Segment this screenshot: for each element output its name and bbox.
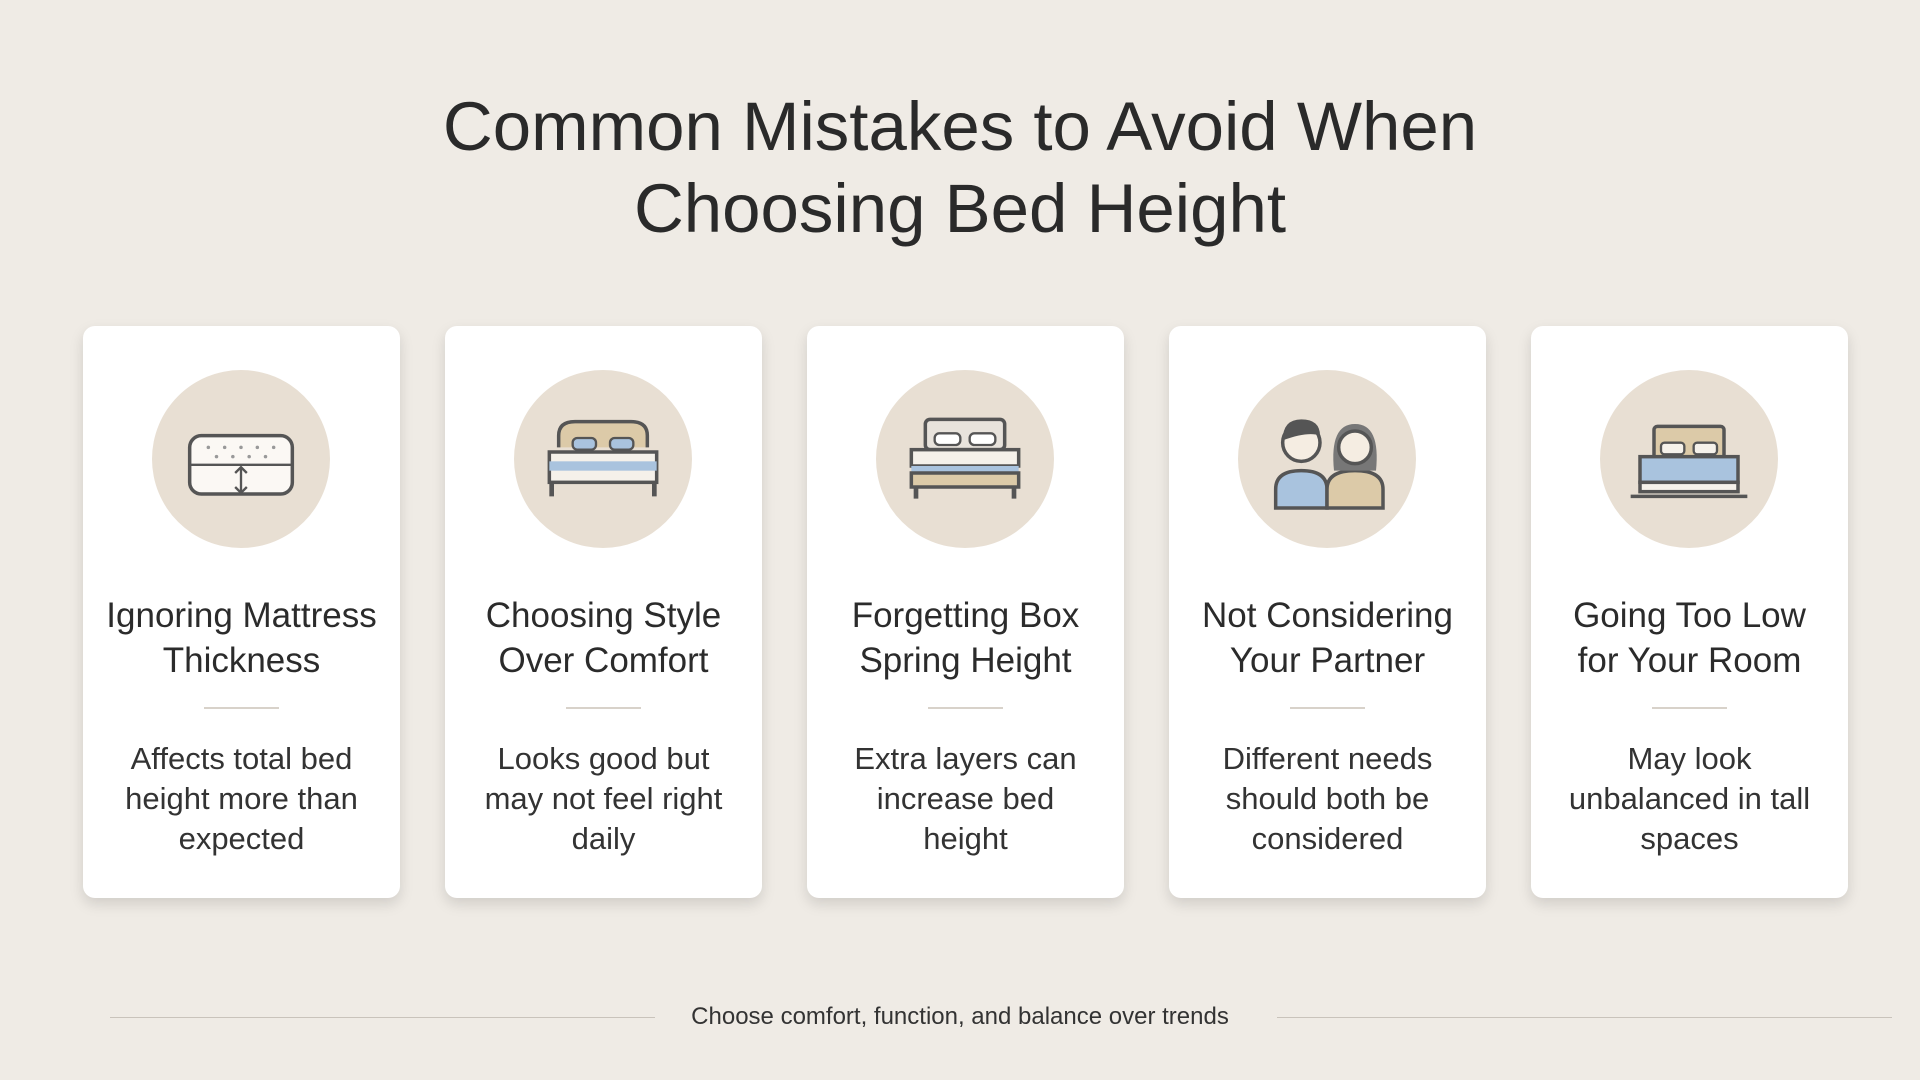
heading bbox=[852, 596, 1079, 680]
icon: mattress bbox=[152, 370, 330, 548]
heading bbox=[1202, 596, 1453, 680]
description: expected bbox=[179, 821, 304, 856]
heading bbox=[106, 596, 377, 680]
card: style over comfort bbox=[445, 326, 762, 898]
title: Common Mistakes to Avoid When bbox=[443, 88, 1477, 165]
heading bbox=[486, 596, 721, 680]
icon: bed with box spring bbox=[876, 370, 1054, 548]
card: too low bbox=[1531, 326, 1848, 898]
icon: couple bbox=[1238, 370, 1416, 548]
description: considered bbox=[1252, 821, 1403, 856]
heading: Choosing Style bbox=[486, 596, 721, 635]
icon: bed bbox=[514, 370, 692, 548]
description: should both be bbox=[1226, 781, 1429, 816]
description: daily bbox=[572, 821, 635, 856]
icon: low bed bbox=[1600, 370, 1778, 548]
heading: for Your Room bbox=[1578, 641, 1801, 680]
description: height bbox=[923, 821, 1008, 856]
heading: Your Partner bbox=[1230, 641, 1425, 680]
description: Affects total bed bbox=[131, 741, 352, 776]
card: mattress thickness bbox=[83, 326, 400, 898]
description: increase bed bbox=[877, 781, 1054, 816]
description bbox=[1569, 741, 1810, 856]
title bbox=[443, 88, 1477, 247]
heading: Not Considering bbox=[1202, 596, 1453, 635]
heading: Forgetting Box bbox=[852, 596, 1079, 635]
description: height more than bbox=[125, 781, 358, 816]
heading bbox=[1573, 596, 1806, 680]
heading: Going Too Low bbox=[1573, 596, 1806, 635]
description bbox=[125, 741, 358, 856]
description bbox=[854, 741, 1077, 856]
description: Looks good but bbox=[497, 741, 710, 776]
description bbox=[1223, 741, 1432, 856]
description: May look bbox=[1627, 741, 1752, 776]
title: Choosing Bed Height bbox=[634, 170, 1286, 247]
description: unbalanced in tall bbox=[1569, 781, 1810, 816]
card: box spring bbox=[807, 326, 1124, 898]
card: partner bbox=[1169, 326, 1486, 898]
description: may not feel right bbox=[485, 781, 722, 816]
heading: Ignoring Mattress bbox=[106, 596, 377, 635]
description: Extra layers can bbox=[854, 741, 1077, 776]
heading: Over Comfort bbox=[498, 641, 709, 680]
description: Different needs bbox=[1223, 741, 1432, 776]
footer tagline: Choose comfort, function, and balance over trends bbox=[691, 1003, 1229, 1030]
heading: Thickness bbox=[163, 641, 320, 680]
description bbox=[485, 741, 722, 856]
heading: Spring Height bbox=[859, 641, 1072, 680]
description: spaces bbox=[1640, 821, 1739, 856]
